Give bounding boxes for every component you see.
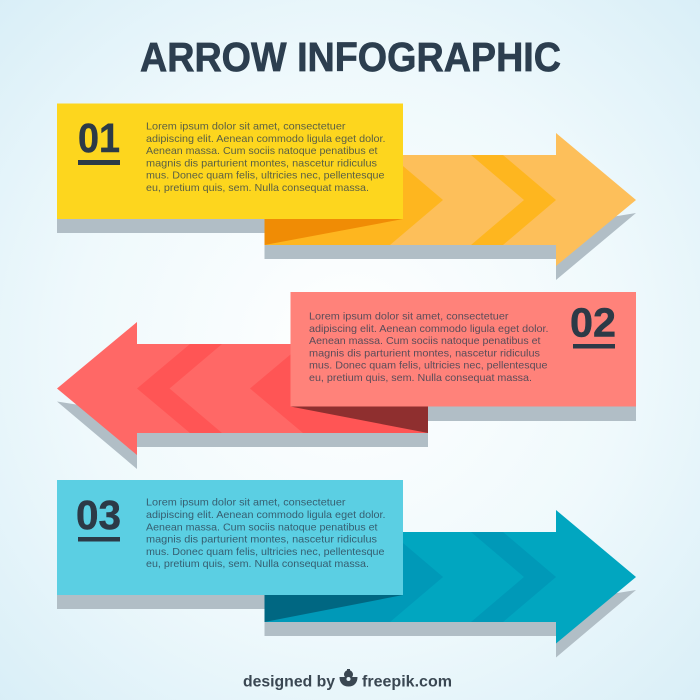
text 03: [146, 498, 386, 570]
panel: step 02: [57, 292, 636, 469]
text 02: adipiscing elit. Aenean commodo ligula eget dolor.: [309, 324, 548, 335]
text 01: adipiscing elit. Aenean commodo ligula eget dolor.: [146, 134, 386, 145]
icon: freepik logo: [340, 669, 358, 686]
footer credit: [243, 669, 452, 690]
chevrons 02: [137, 344, 428, 433]
panel: step 03: [57, 480, 636, 658]
text 01: Lorem ipsum dolor sit amet, consectetuer: [146, 122, 346, 132]
shadow: arrow 01: [264, 213, 636, 280]
arrow 02: [57, 322, 428, 455]
text 01: mus. Donec quam felis, ultricies nec, pellentesque: [146, 171, 385, 182]
fold 02: [290, 406, 428, 433]
footer text: designed by: designed by: [243, 674, 335, 690]
text 02: Lorem ipsum dolor sit amet, consectetuer: [309, 312, 509, 322]
text 02: magnis dis parturient montes, nascetur ridiculus: [309, 348, 540, 359]
text 02: eu, pretium quis, sem. Nulla consequat massa.: [309, 373, 532, 384]
text 03: Aenean massa. Cum sociis natoque penatibus et: [146, 522, 378, 533]
shadow: arrow 02: [57, 402, 428, 469]
shadow: card 02: [290, 406, 636, 421]
text 03: Lorem ipsum dolor sit amet, consectetuer: [146, 498, 346, 509]
text 03: mus. Donec quam felis, ultricies nec, pellentesque: [146, 547, 385, 558]
text 01: [146, 122, 386, 194]
underline 02: [573, 344, 615, 348]
text 03: eu, pretium quis, sem. Nulla consequat massa.: [146, 559, 369, 570]
text 03: magnis dis parturient montes, nascetur ridiculus: [146, 535, 377, 546]
number 02: 02: [570, 300, 616, 346]
text 01: eu, pretium quis, sem. Nulla consequat massa.: [146, 183, 369, 194]
card 03: [57, 480, 403, 595]
underline 01: [78, 160, 120, 165]
panel: step 01: [57, 104, 636, 280]
chevrons 03: [264, 532, 556, 622]
text 01: Aenean massa. Cum sociis natoque penatibus et: [146, 146, 378, 157]
text 02: Aenean massa. Cum sociis natoque penatibus et: [309, 336, 541, 347]
text 02: [309, 312, 548, 384]
text 01: magnis dis parturient montes, nascetur ridiculus: [146, 158, 377, 169]
footer text: freepik.com: freepik.com: [362, 674, 452, 690]
shadow: card 01: [57, 219, 403, 233]
chevrons 01: [264, 155, 556, 245]
arrow 03: [264, 510, 636, 644]
card 01: [57, 104, 403, 219]
fold 01: [264, 219, 403, 245]
number 03: 03: [76, 492, 121, 538]
text 02: mus. Donec quam felis, ultricies nec, pellentesque: [309, 361, 548, 372]
title: ARROW INFOGRAPHIC: [140, 34, 561, 80]
shadow: arrow 03: [264, 590, 636, 658]
card 02: [290, 292, 636, 406]
underline 03: [78, 537, 120, 542]
fold 03: [264, 595, 403, 622]
arrow 01: [264, 133, 636, 266]
text 03: adipiscing elit. Aenean commodo ligula eget dolor.: [146, 510, 386, 521]
number 01: 01: [78, 115, 120, 161]
shadow: card 03: [57, 595, 403, 609]
